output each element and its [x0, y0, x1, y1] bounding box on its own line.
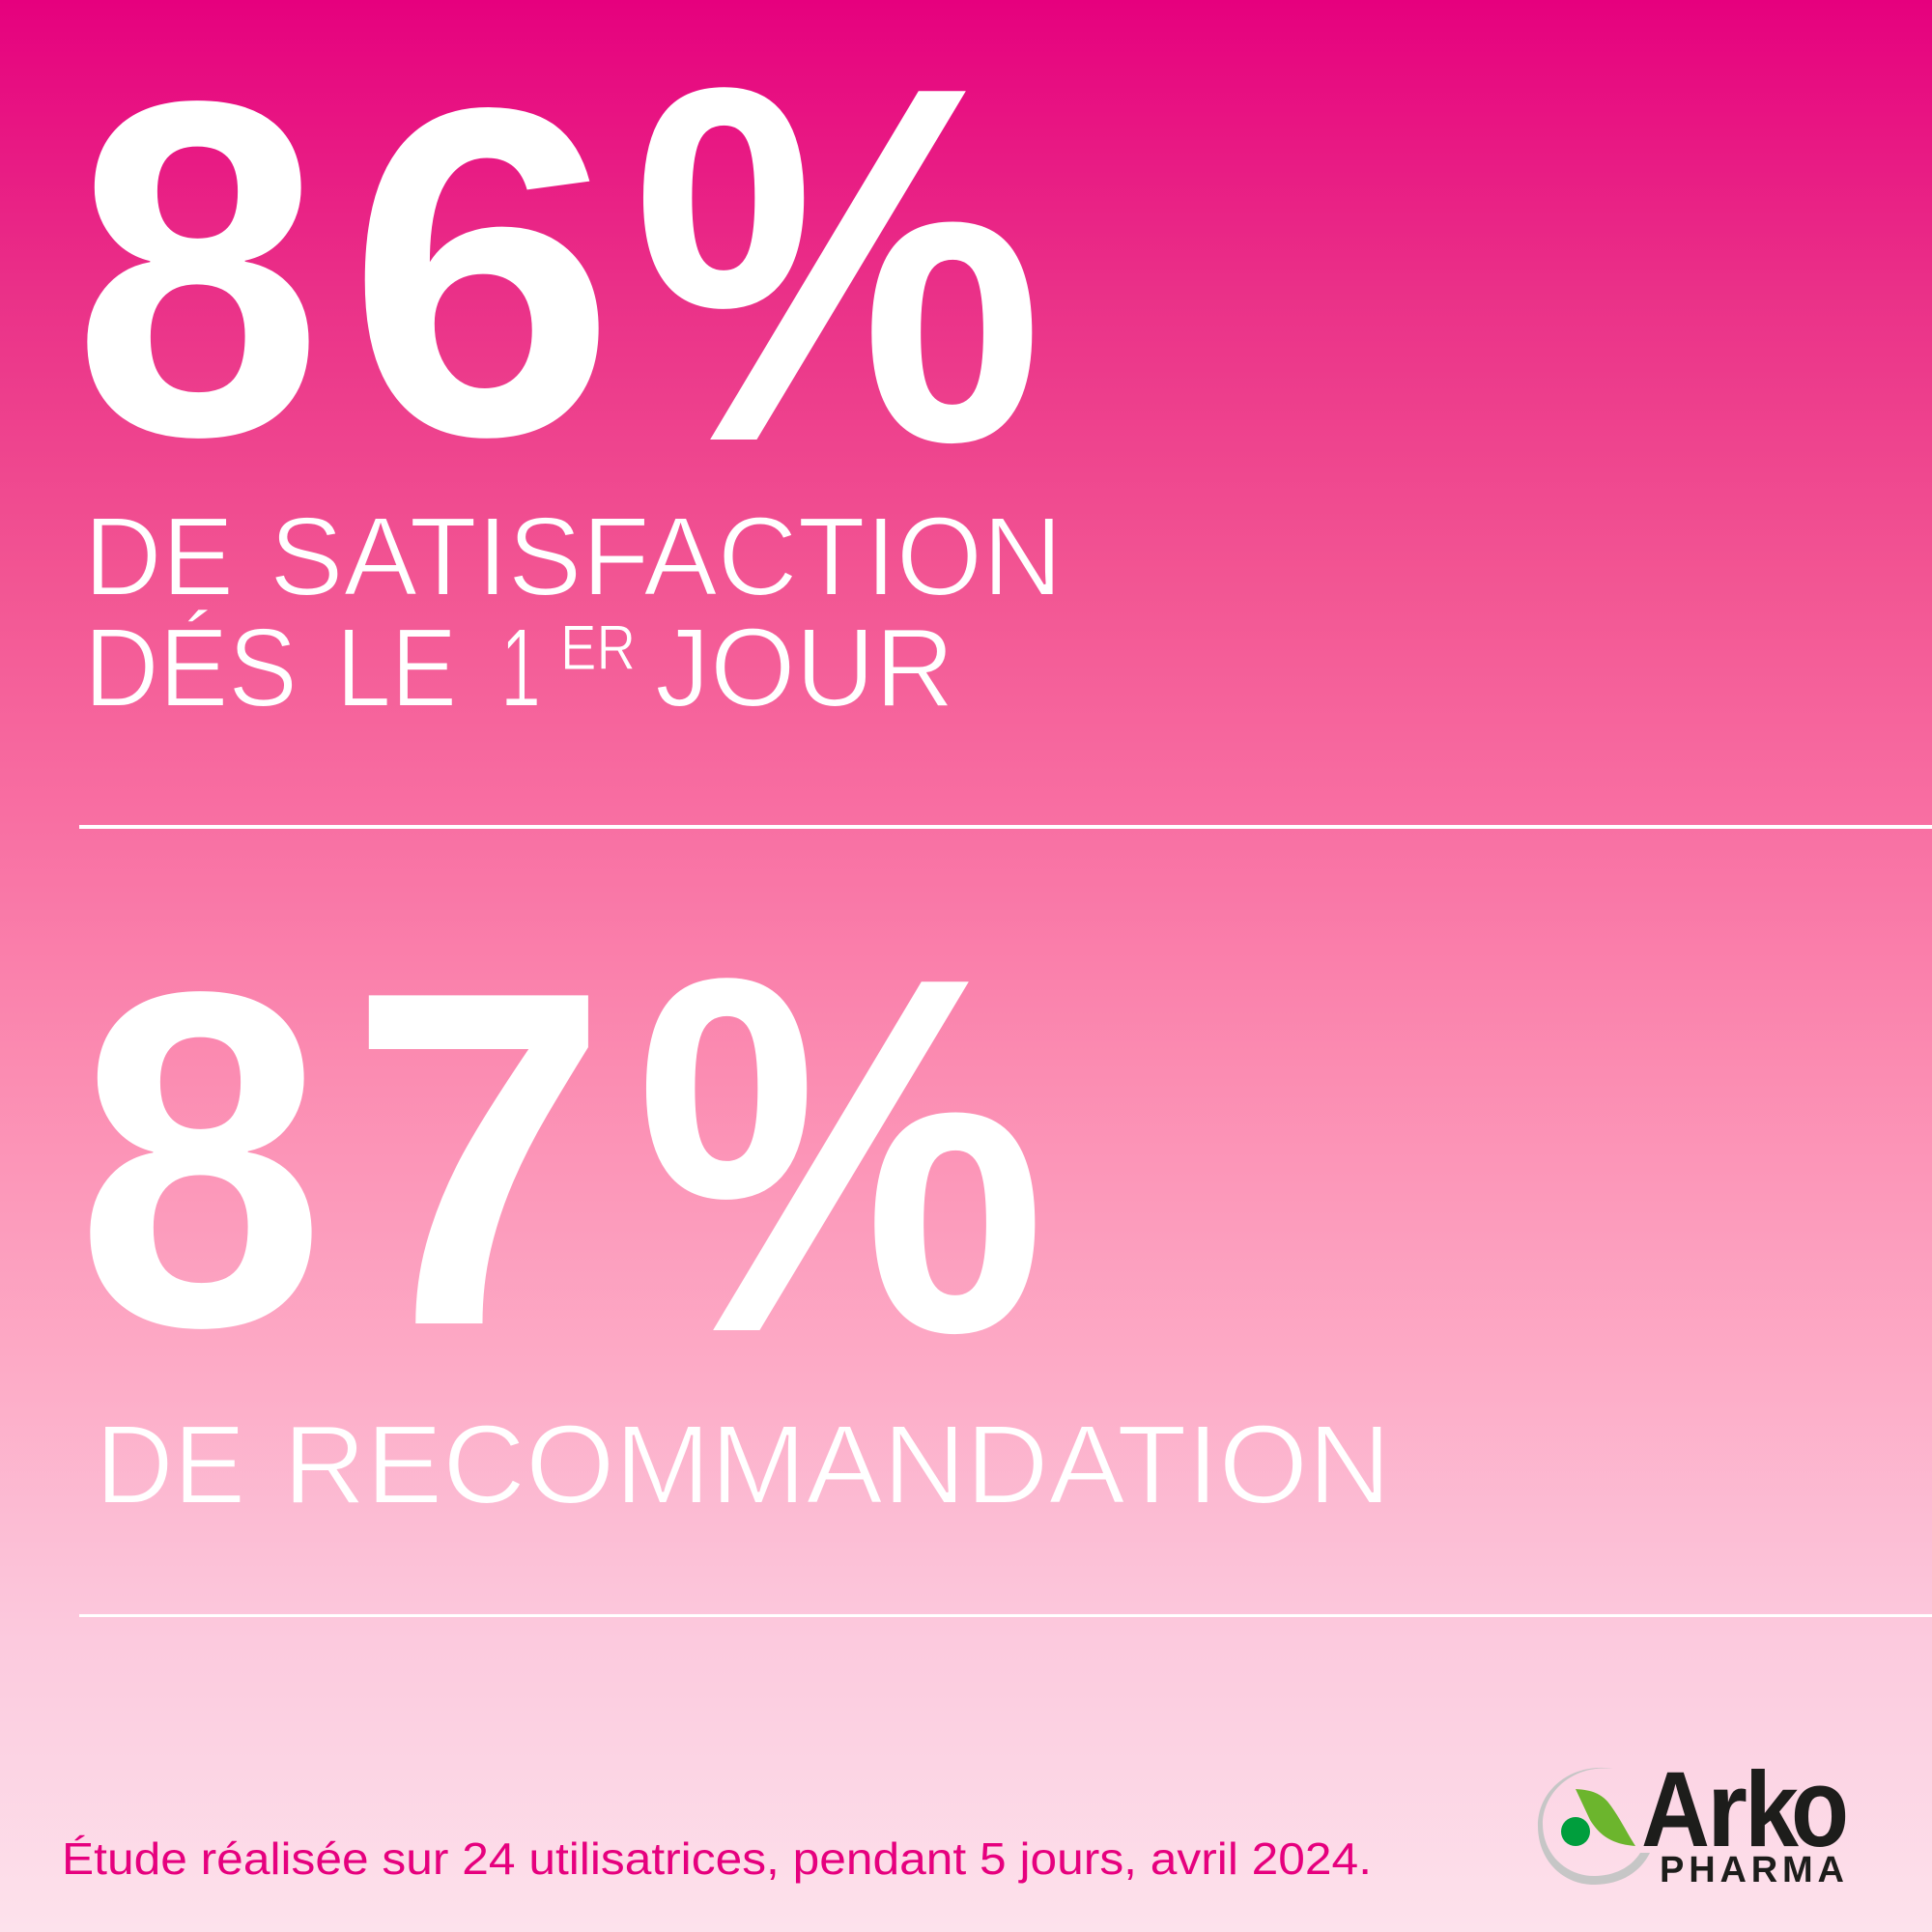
label: de satisfaction dès le 1er jour: DÉS — [84, 605, 298, 730]
label: de recommandation: DE — [96, 1402, 245, 1527]
wordmark: Pharma: PHARMA — [1660, 1850, 1844, 1890]
statistic: 87%: % — [635, 871, 1047, 1438]
statistic: 87%: 7 — [349, 892, 609, 1425]
wordmark: Arko: A — [1641, 1750, 1710, 1869]
label: de satisfaction dès le 1er jour: ER — [560, 611, 636, 683]
statistic: 87%: 8 — [76, 893, 326, 1426]
statistic: 87% — [76, 871, 1047, 1438]
label: de recommandation: RECOMMANDATION — [283, 1402, 1391, 1527]
wordmark: Arko: r — [1707, 1750, 1747, 1869]
label: de satisfaction dès le 1er jour: JOUR — [655, 605, 954, 730]
wordmark: Arko: o — [1791, 1745, 1849, 1870]
logo: Arko Pharma — [1538, 1745, 1849, 1890]
icon: green dot — [1561, 1817, 1590, 1846]
icon: grey crescent ring — [1538, 1768, 1650, 1885]
statistic: 86%: 8 — [73, 2, 323, 535]
label: de satisfaction dès le 1er jour: DE — [84, 494, 234, 619]
label: de satisfaction dès le 1er jour — [84, 494, 1063, 730]
wordmark: Arko: k — [1745, 1750, 1800, 1869]
divider — [79, 825, 1932, 829]
icon: green leaf — [1576, 1789, 1635, 1846]
statistic: 86%: 6 — [347, 11, 616, 533]
label: de satisfaction dès le 1er jour: SATISFACTION — [270, 494, 1063, 619]
label: de satisfaction dès le 1er jour: LE — [336, 605, 457, 730]
panel: 87% recommandation — [76, 871, 1391, 1527]
divider — [79, 1614, 1932, 1617]
footnote: Étude réalisée sur 24 utilisatrices, pendant 5 jours, avril 2024. — [62, 1833, 1372, 1884]
statistic: 86% — [73, 0, 1044, 548]
wordmark: Arko — [1641, 1745, 1849, 1870]
label: de satisfaction dès le 1er jour: 1 — [500, 605, 541, 730]
panel: 86% satisfaction — [73, 0, 1063, 730]
